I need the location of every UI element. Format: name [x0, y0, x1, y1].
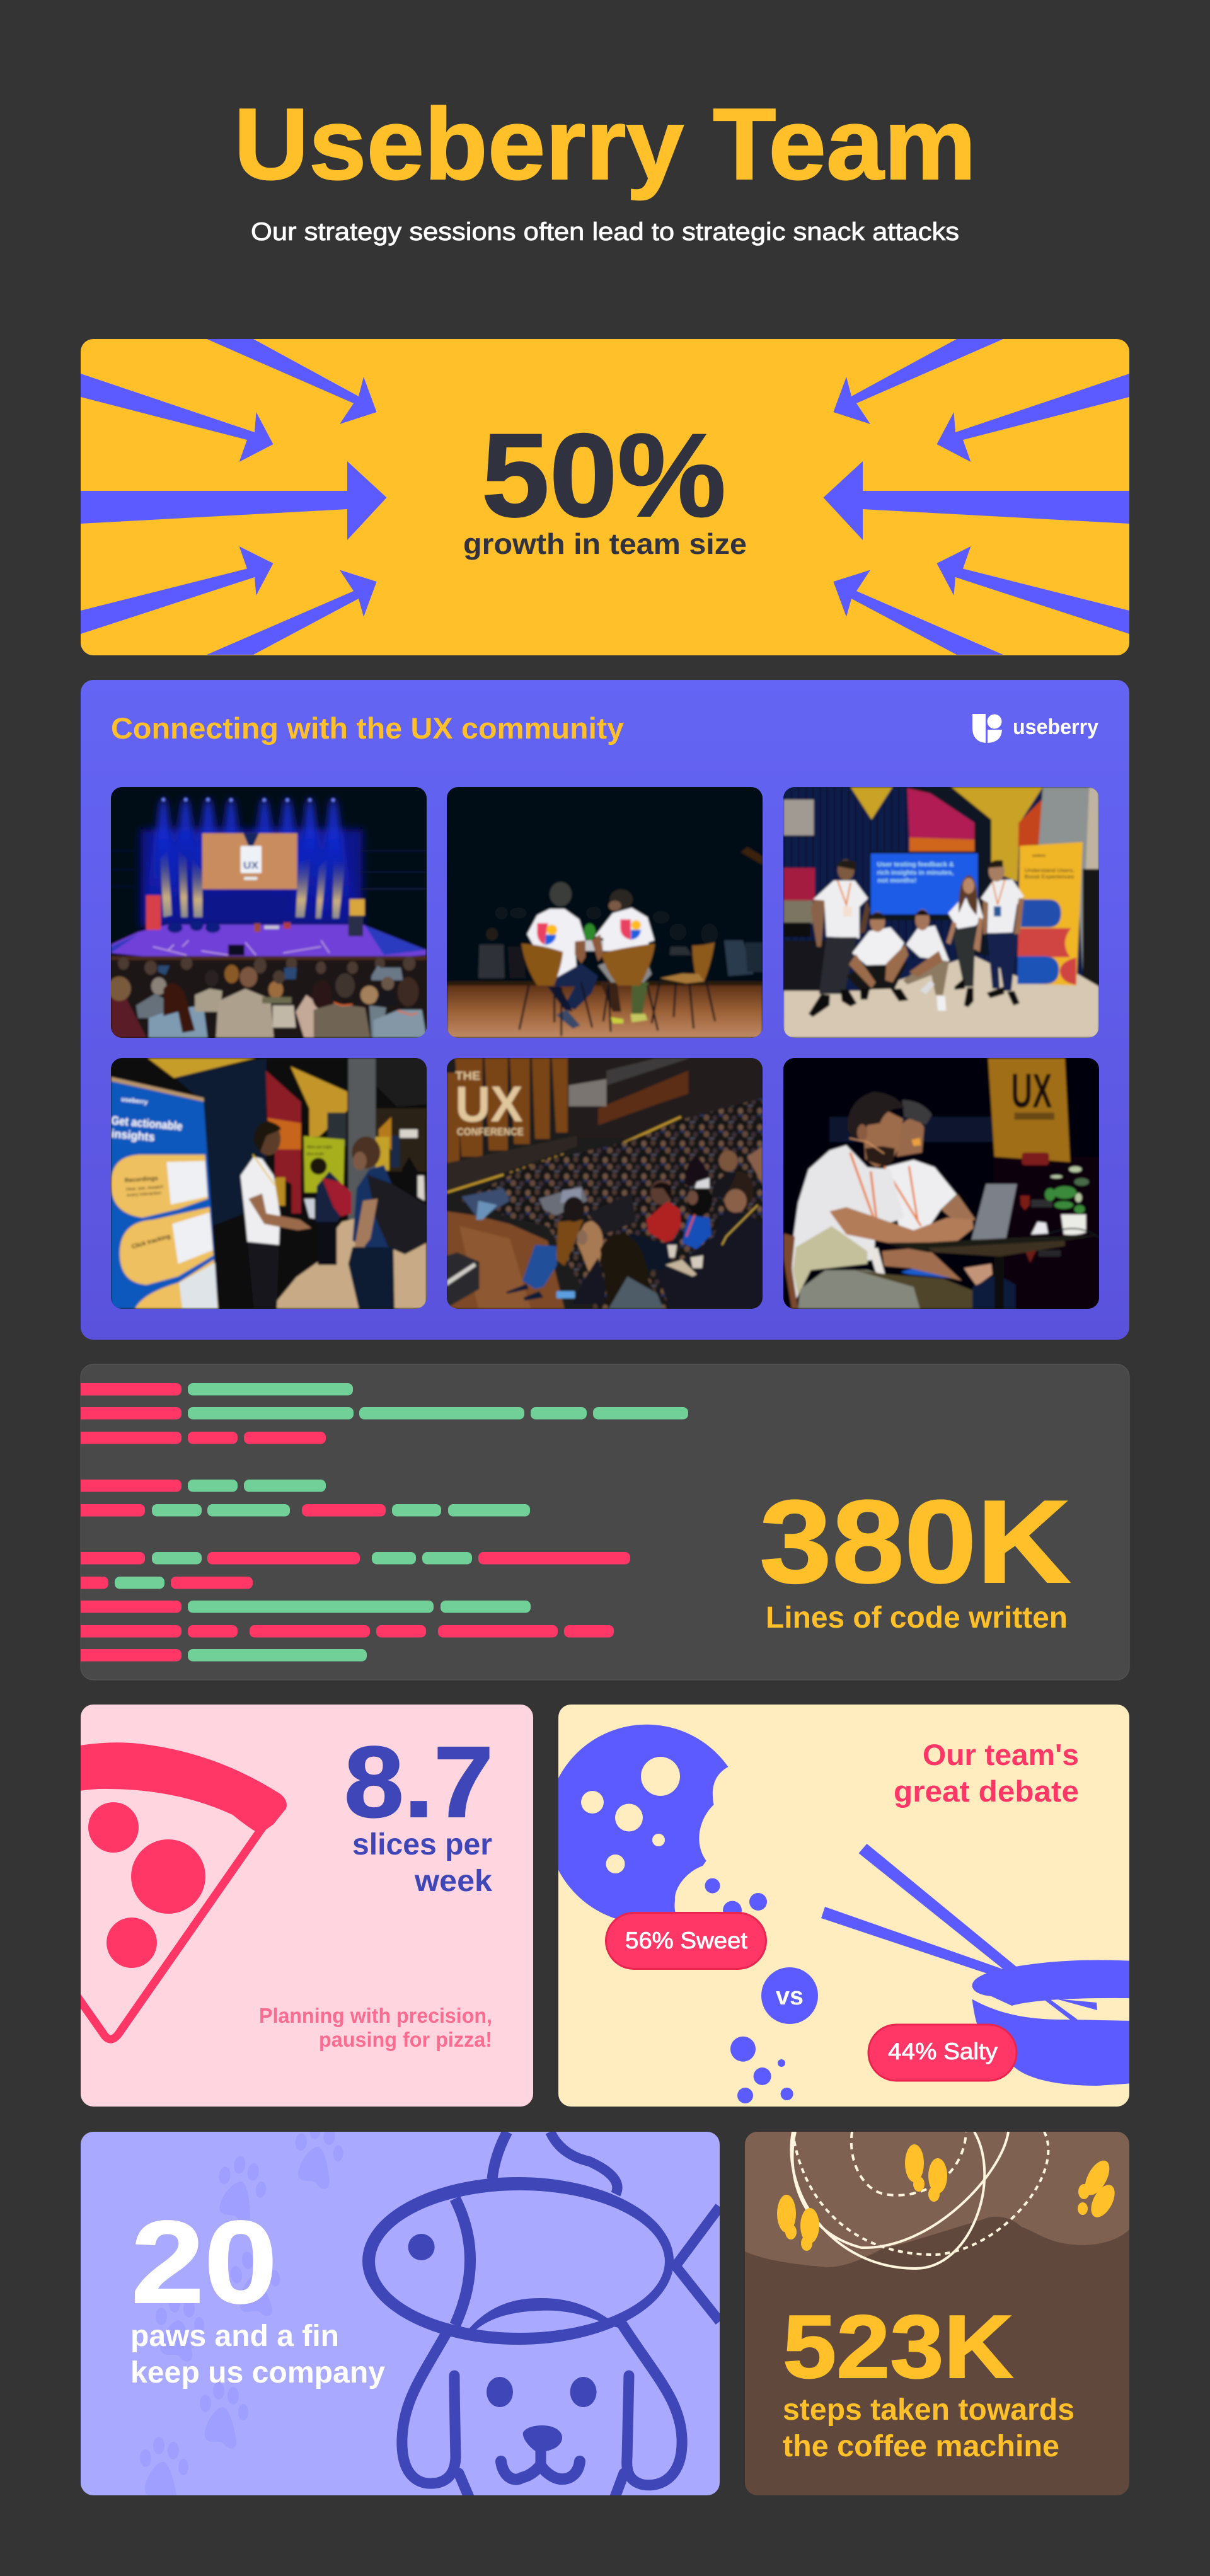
- panel: UX community: [81, 680, 1129, 1340]
- photo: conference stage: UX: [243, 860, 258, 871]
- stat label: slices per: [352, 1828, 492, 1861]
- stat label: the coffee machine: [783, 2430, 1059, 2463]
- distant people: [402, 1157, 418, 1192]
- speaker left: [550, 882, 572, 906]
- audience: [111, 958, 427, 1038]
- projected logo: CONFERENCE: [457, 1126, 524, 1138]
- laptop: [971, 1184, 1017, 1239]
- badge: vs: [761, 1967, 818, 2024]
- stat label: [130, 2320, 385, 2389]
- team member 3: [903, 959, 949, 995]
- projected logo: THE: [455, 1069, 480, 1083]
- photo: booth conversation: every interaction: [127, 1190, 161, 1198]
- floor: [783, 955, 1099, 1038]
- subtitle: Our strategy sessions often lead to strategic snack attacks: [251, 218, 959, 246]
- useberry logo: useberry: [1013, 715, 1098, 739]
- photo: booth conversation: Click tracking: [131, 1233, 171, 1251]
- badge: vs: vs: [776, 1982, 804, 2010]
- stage curtains lit gold: [160, 850, 345, 918]
- icon: bitten cookie: [547, 1725, 767, 1924]
- icon: dog: [402, 2298, 682, 2498]
- title: Useberry Team: [234, 88, 976, 201]
- floor: [447, 1211, 565, 1309]
- panel: team growth: [81, 339, 1129, 655]
- table: [889, 1236, 1099, 1252]
- icon: pizza slice: [74, 1742, 287, 2039]
- front row attendees: [461, 1188, 510, 1220]
- arrows pointing inward from right: [823, 339, 1129, 655]
- photo: booth conversation: Get actionable: [111, 1113, 183, 1133]
- stat: 50%: 50%: [481, 409, 726, 541]
- stat label: Lines of code written: [766, 1601, 1068, 1635]
- footprints: [777, 2144, 1119, 2251]
- photo: team at booth: useberry: [1032, 854, 1046, 858]
- yellow-green poster: [304, 1136, 345, 1192]
- pill: 44% salty: 44% Salty: [888, 2038, 998, 2064]
- photo: team at booth: Understand Users,: [1025, 867, 1075, 873]
- legs: [798, 1270, 922, 1309]
- photo: booth conversation: drive results: [307, 1151, 324, 1156]
- photo: booth conversation: insights: [111, 1127, 156, 1144]
- team member 2: [846, 962, 908, 990]
- floor: [270, 1217, 427, 1309]
- stat: 8.7: 8.7: [344, 1725, 493, 1838]
- icon: fish: [362, 2132, 720, 2345]
- stat label: steps taken towards: [783, 2393, 1075, 2427]
- panel: pizza: [74, 1705, 533, 2107]
- team member 4: [948, 899, 983, 929]
- UX banner: [988, 1058, 1070, 1162]
- heading: great debate: [894, 1774, 1079, 1808]
- winding paths: [791, 2132, 1048, 2268]
- heading: Connecting with the UX community: [111, 711, 624, 745]
- stat label: [783, 2393, 1075, 2463]
- caption: Planning with precision,: [259, 2004, 492, 2027]
- pill: 44% salty: [868, 2025, 1017, 2081]
- photo: booth conversation: [111, 1058, 427, 1309]
- team member 5: [981, 880, 1024, 933]
- photo: booth conversation: Recordings: [124, 1175, 158, 1184]
- caption: [259, 2004, 492, 2051]
- heading: [894, 1738, 1079, 1808]
- person at table: [316, 1171, 340, 1224]
- wood wall panels: [447, 1058, 568, 1163]
- screen: [202, 833, 297, 889]
- photo: team at booth: Boost Experiences: [1025, 873, 1074, 880]
- panel: pets: [81, 2120, 720, 2504]
- chair: [783, 1233, 798, 1309]
- team member 1: [810, 899, 826, 946]
- pill: 56% sweet: [606, 1913, 766, 1969]
- code bar chart: [63, 1383, 688, 1661]
- photo: team at booth: not months!: [877, 878, 916, 885]
- banner: [1018, 842, 1083, 986]
- paw prints: [140, 2120, 345, 2504]
- stat: 380K: 380K: [759, 1476, 1071, 1607]
- photo: team at booth: [783, 787, 1099, 1038]
- arrows pointing inward from left: [81, 339, 387, 655]
- audience figures: [478, 945, 505, 978]
- stat label: paws and a fin: [130, 2320, 339, 2353]
- stat label: keep us company: [130, 2356, 385, 2389]
- photo: team at booth: User testing feedback &: [877, 861, 954, 868]
- heading: Our team's: [923, 1738, 1079, 1771]
- man with backpack: [352, 1165, 393, 1248]
- photo: two speakers on chairs: [447, 787, 763, 1038]
- plant in pot: [1061, 1214, 1086, 1235]
- man front: [792, 1145, 904, 1299]
- photo: booth conversation: useberry: [121, 1096, 148, 1107]
- stat label: [352, 1828, 492, 1898]
- panel: sweet vs salty: [547, 1705, 1134, 2107]
- photo: two men at laptop: [783, 1058, 1099, 1309]
- useberry logo: [972, 714, 1098, 743]
- photo: booth conversation: Hear, see, rewatch: [126, 1184, 163, 1192]
- photo: two men at laptop: UX: [1011, 1064, 1052, 1118]
- stat label: week: [414, 1865, 492, 1898]
- icon: noodle bowl with chopsticks: [821, 1844, 1134, 2086]
- screen: [869, 851, 979, 920]
- scattered dots: [730, 2037, 793, 2103]
- speaker right: [609, 889, 633, 909]
- stat: 523K: 523K: [783, 2297, 1013, 2397]
- panel: coffee steps: [745, 2132, 1129, 2495]
- man in white shirt: [241, 1157, 280, 1245]
- stage floor: [111, 924, 426, 959]
- sponsor marks: [1020, 1195, 1030, 1210]
- projected logo: UX: [455, 1076, 523, 1132]
- stat label: growth in team size: [463, 527, 747, 560]
- pill: 56% sweet: 56% Sweet: [625, 1928, 748, 1953]
- panel: lines of code: [63, 1364, 1129, 1680]
- photo: conference stage: [111, 787, 427, 1038]
- banner blue: [111, 1077, 218, 1309]
- wooden chairs: [521, 943, 563, 986]
- photo: team at booth: rich insights in minutes,: [877, 870, 954, 877]
- man behind: [884, 1160, 957, 1234]
- lighter hills: [745, 2132, 1129, 2267]
- plant and table: [584, 924, 596, 940]
- caption: pausing for pizza!: [319, 2028, 492, 2051]
- photo: auditorium crowd: [447, 1058, 763, 1309]
- crowd: [459, 1098, 763, 1309]
- table: [212, 1224, 321, 1299]
- photo: booth conversation: Where user insights: [307, 1144, 332, 1149]
- strip lights: [447, 1117, 681, 1192]
- stat: 20: 20: [131, 2197, 277, 2328]
